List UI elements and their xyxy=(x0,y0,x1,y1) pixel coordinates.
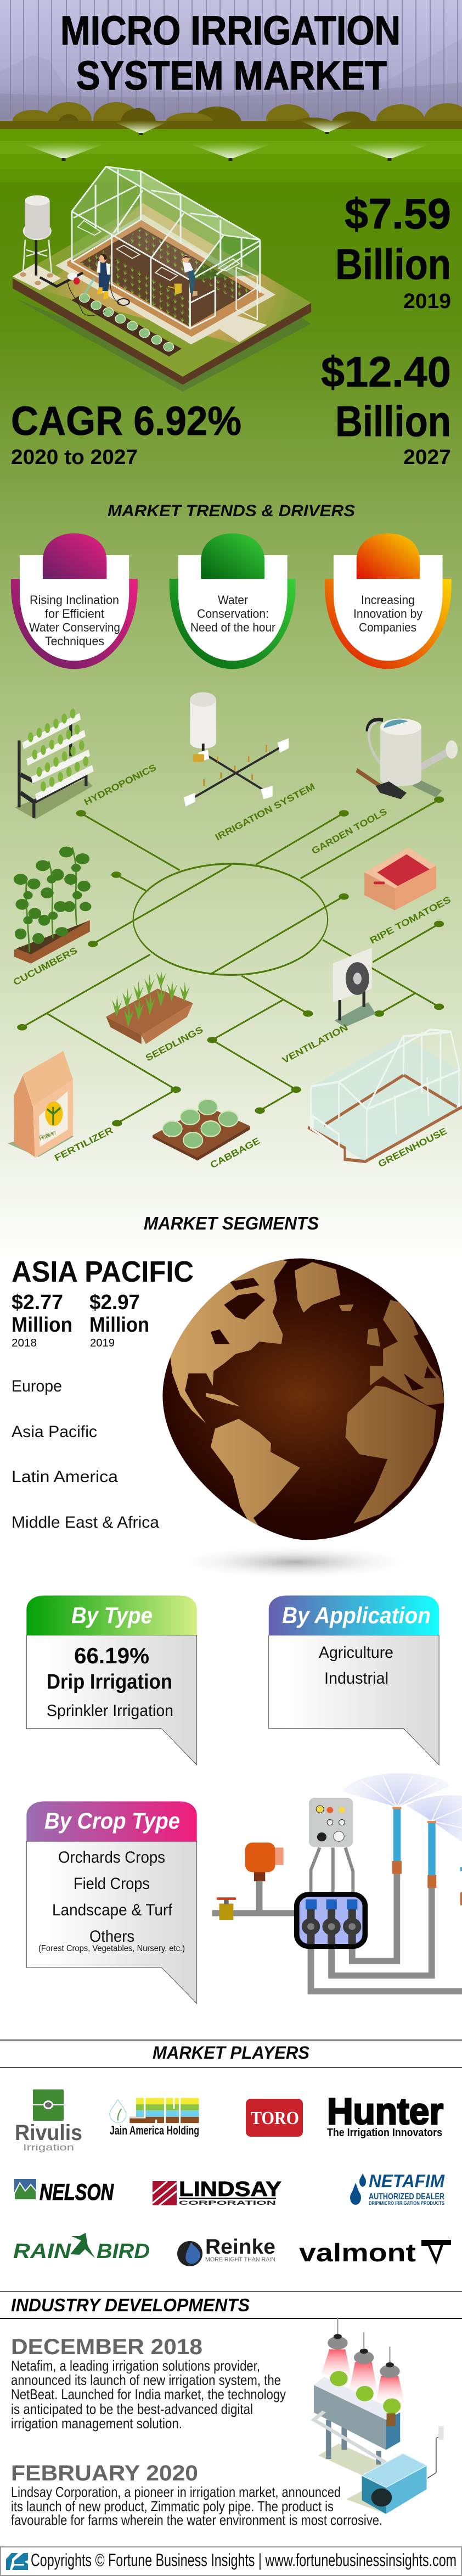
by type text xyxy=(47,1602,173,1720)
sprinklers xyxy=(13,118,440,161)
by crop type text: Landscape & Turf xyxy=(52,1901,173,1919)
diagram labels: IRRIGATION SYSTEM xyxy=(213,781,317,843)
icon: garden tools xyxy=(357,719,458,799)
by crop type text: Field Crops xyxy=(74,1875,150,1893)
by application text xyxy=(282,1602,431,1687)
CAGR xyxy=(11,398,241,469)
logo: jain xyxy=(110,2098,199,2137)
icon: seedlings xyxy=(106,970,193,1044)
logo: toro xyxy=(246,2099,303,2137)
diagram icons xyxy=(7,692,462,1161)
title xyxy=(60,8,401,98)
market size 2019 xyxy=(335,189,451,313)
sky with stripes xyxy=(0,0,462,124)
logos xyxy=(13,2089,451,2267)
illustration: greenhouse on platform xyxy=(13,166,311,392)
title: MICRO IRRIGATION xyxy=(60,8,401,53)
logo: netafim: NETAFIM xyxy=(369,2171,445,2191)
market size 2019: 2019 xyxy=(403,290,451,313)
logo: rain bird xyxy=(13,2233,150,2263)
CAGR: CAGR 6.92% xyxy=(11,398,241,444)
region panel: asia pacific stats: Million xyxy=(89,1314,149,1337)
region panel: asia pacific stats: 2019 xyxy=(90,1337,115,1349)
bushes xyxy=(0,102,462,139)
water spray xyxy=(342,1773,462,1842)
by type text: By Type xyxy=(71,1602,153,1628)
icon: ripe tomatoes xyxy=(364,847,436,910)
region panel: asia pacific stats xyxy=(12,1255,194,1349)
market size 2027 xyxy=(321,348,451,469)
by crop type text: Orchards Crops xyxy=(58,1848,165,1867)
icon: cabbage xyxy=(153,1099,250,1161)
by application text: Industrial xyxy=(324,1669,388,1687)
logo: rivulis xyxy=(15,2089,82,2153)
title: SYSTEM MARKET xyxy=(76,53,387,98)
market size 2027: 2027 xyxy=(403,446,451,469)
by type text: Sprinkler Irrigation xyxy=(47,1702,173,1720)
development: december 2018 xyxy=(11,2335,286,2432)
logo: reinke: Reinke xyxy=(205,2236,275,2259)
logo: netafim: DRIP/MICRO IRRIGATION PRODUCTS xyxy=(369,2200,444,2206)
region list: Middle East & Africa xyxy=(12,1513,159,1532)
diagram labels: CUCUMBERS xyxy=(12,945,79,988)
region list: Europe xyxy=(12,1377,62,1395)
heading: market segments: MARKET SEGMENTS xyxy=(144,1213,319,1233)
logo: reinke xyxy=(177,2236,275,2266)
card: water conservation: Need of the hour xyxy=(190,621,275,634)
icon: fertilizer bag: Fertilizer xyxy=(39,1129,57,1143)
card: increasing innovation: Increasing xyxy=(361,593,415,607)
card: water conservation xyxy=(170,533,296,669)
development: december 2018: announced its launch of new irrigation system, the xyxy=(11,2372,281,2388)
by crop type text: Others xyxy=(89,1927,134,1946)
market size 2019: $7.59 xyxy=(345,189,451,238)
logo: netafim xyxy=(350,2171,445,2206)
card: rising inclination xyxy=(11,533,138,669)
region panel: asia pacific stats: Million xyxy=(12,1314,72,1337)
driver cards xyxy=(11,533,452,669)
illustration: irrigation controller and pipes xyxy=(212,1773,462,1991)
by type text: 66.19% xyxy=(74,1643,149,1668)
development: december 2018: Netafim, a leading irrigation solutions provider, xyxy=(11,2357,260,2374)
by crop type text xyxy=(38,1808,185,1953)
icon: irrigation system xyxy=(184,692,289,807)
logo: toro: TORO xyxy=(251,2108,299,2128)
gardener with hose xyxy=(84,254,110,299)
development: december 2018: NetBeat. Launched for India market, the technology xyxy=(11,2386,286,2402)
diagram labels: HYDROPONICS xyxy=(82,762,158,808)
panel: by type xyxy=(26,1596,197,1765)
development: february 2020: Lindsay Corporation, a pioneer in irrigation market, announced xyxy=(11,2484,341,2500)
card: increasing innovation: Innovation by xyxy=(353,607,422,621)
diagram labels: FERTILIZER xyxy=(53,1125,115,1164)
icon: fertilizer bag xyxy=(7,1051,74,1158)
diagram labels: GREENHOUSE xyxy=(376,1126,449,1170)
by application text: By Application xyxy=(282,1602,431,1628)
sprinkler risers xyxy=(392,1807,462,1906)
logo: rain bird: RAIN xyxy=(13,2240,72,2263)
region panel: asia pacific stats: ASIA PACIFIC xyxy=(12,1255,194,1288)
development: february 2020 xyxy=(11,2461,382,2528)
logo: lindsay: CORPORATION xyxy=(179,2200,276,2206)
icon: cucumbers xyxy=(14,847,91,964)
logo: hunter: The Irrigation Innovators xyxy=(327,2127,442,2139)
diagram labels: VENTILATION xyxy=(280,1022,350,1066)
icon: greenhouse xyxy=(308,1030,462,1161)
globe xyxy=(162,1256,445,1579)
card: rising inclination: Rising Inclination xyxy=(30,593,119,607)
logo: valmont: valmont xyxy=(299,2238,416,2267)
logo: nelson: NELSON xyxy=(40,2179,114,2205)
diagram labels: GARDEN TOOLS xyxy=(310,806,389,856)
hub diagram connectors xyxy=(17,796,444,1126)
icon: fortune business insights logo xyxy=(6,2553,28,2570)
logo: rain bird: BIRD xyxy=(97,2240,150,2263)
heading: industry developments: INDUSTRY DEVELOPMENTS xyxy=(11,2295,250,2315)
water meter and valve xyxy=(217,1842,284,1920)
diagram labels xyxy=(12,762,453,1171)
development: december 2018: irrigation management solution. xyxy=(11,2415,182,2432)
logo: hunter: Hunter xyxy=(327,2091,443,2132)
development: december 2018: DECEMBER 2018 xyxy=(11,2335,202,2359)
icon: ventilation xyxy=(333,948,376,1027)
development: february 2020: FEBRUARY 2020 xyxy=(11,2461,198,2485)
logo: lindsay xyxy=(153,2178,281,2206)
gardener with watering can xyxy=(168,255,198,297)
card: increasing innovation xyxy=(325,533,452,669)
logo: valmont xyxy=(299,2238,451,2267)
cabbage row xyxy=(67,271,182,356)
logo: lindsay: LINDSAY xyxy=(179,2178,281,2201)
development: february 2020: its launch of new product, Zimmatic poly pipe. The product is xyxy=(11,2498,334,2514)
logo: nelson xyxy=(14,2179,114,2205)
market size 2027: $12.40 xyxy=(321,348,451,396)
card: water conservation: Conservation: xyxy=(197,607,269,621)
region list: Latin America xyxy=(12,1468,118,1486)
region list xyxy=(12,1377,159,1532)
water tower xyxy=(20,195,83,287)
diagram labels: SEEDLINGS xyxy=(144,1024,205,1064)
illustration: hydroponic unit xyxy=(314,2317,444,2514)
region panel: asia pacific stats: $2.77 xyxy=(12,1291,63,1314)
field bands xyxy=(0,129,462,182)
logo: reinke: MORE RIGHT THAN RAIN xyxy=(205,2256,275,2263)
heading: market trends and drivers: MARKET TRENDS & DRIVERS xyxy=(108,502,355,520)
region panel: asia pacific stats: $2.97 xyxy=(89,1291,140,1314)
logo: jain: Jain America Holding xyxy=(110,2124,199,2137)
heading: market players: MARKET PLAYERS xyxy=(153,2043,310,2063)
development: february 2020: favourable for farms wherein the water environment is most corrosive. xyxy=(11,2512,382,2528)
logo: rivulis: Rivulis xyxy=(15,2121,82,2145)
valve box xyxy=(297,1895,365,1947)
card: increasing innovation: Companies xyxy=(359,621,416,634)
icon: hydroponics xyxy=(15,708,93,819)
logo: rivulis: Irrigation xyxy=(23,2142,74,2153)
by crop type text: By Crop Type xyxy=(44,1808,180,1834)
by crop type text: (Forest Crops, Vegetables, Nursery, etc.) xyxy=(38,1944,185,1953)
by application text: Agriculture xyxy=(319,1644,393,1662)
control panel xyxy=(309,1798,353,1847)
panel: by application xyxy=(269,1596,439,1765)
card: water conservation: Water xyxy=(218,593,248,607)
CAGR: 2020 to 2027 xyxy=(11,446,138,469)
logo: netafim: AUTHORIZED DEALER xyxy=(369,2192,444,2201)
card: rising inclination: Water Conserving xyxy=(29,621,120,634)
diagram labels: RIPE TOMATOES xyxy=(368,895,453,946)
footer xyxy=(0,2547,462,2575)
card: rising inclination: for Efficient xyxy=(45,607,104,621)
by type text: Drip Irrigation xyxy=(47,1670,172,1694)
panel: by crop type xyxy=(26,1801,197,2004)
region list: Asia Pacific xyxy=(12,1423,97,1441)
development: december 2018: is anticipated to be the best-advanced digital xyxy=(11,2401,253,2417)
diagram labels: CABBAGE xyxy=(209,1136,262,1171)
hero panel xyxy=(0,0,462,469)
pipes xyxy=(212,1873,462,1991)
card: rising inclination: Techniques xyxy=(45,634,104,648)
region panel: asia pacific stats: 2018 xyxy=(12,1337,37,1349)
